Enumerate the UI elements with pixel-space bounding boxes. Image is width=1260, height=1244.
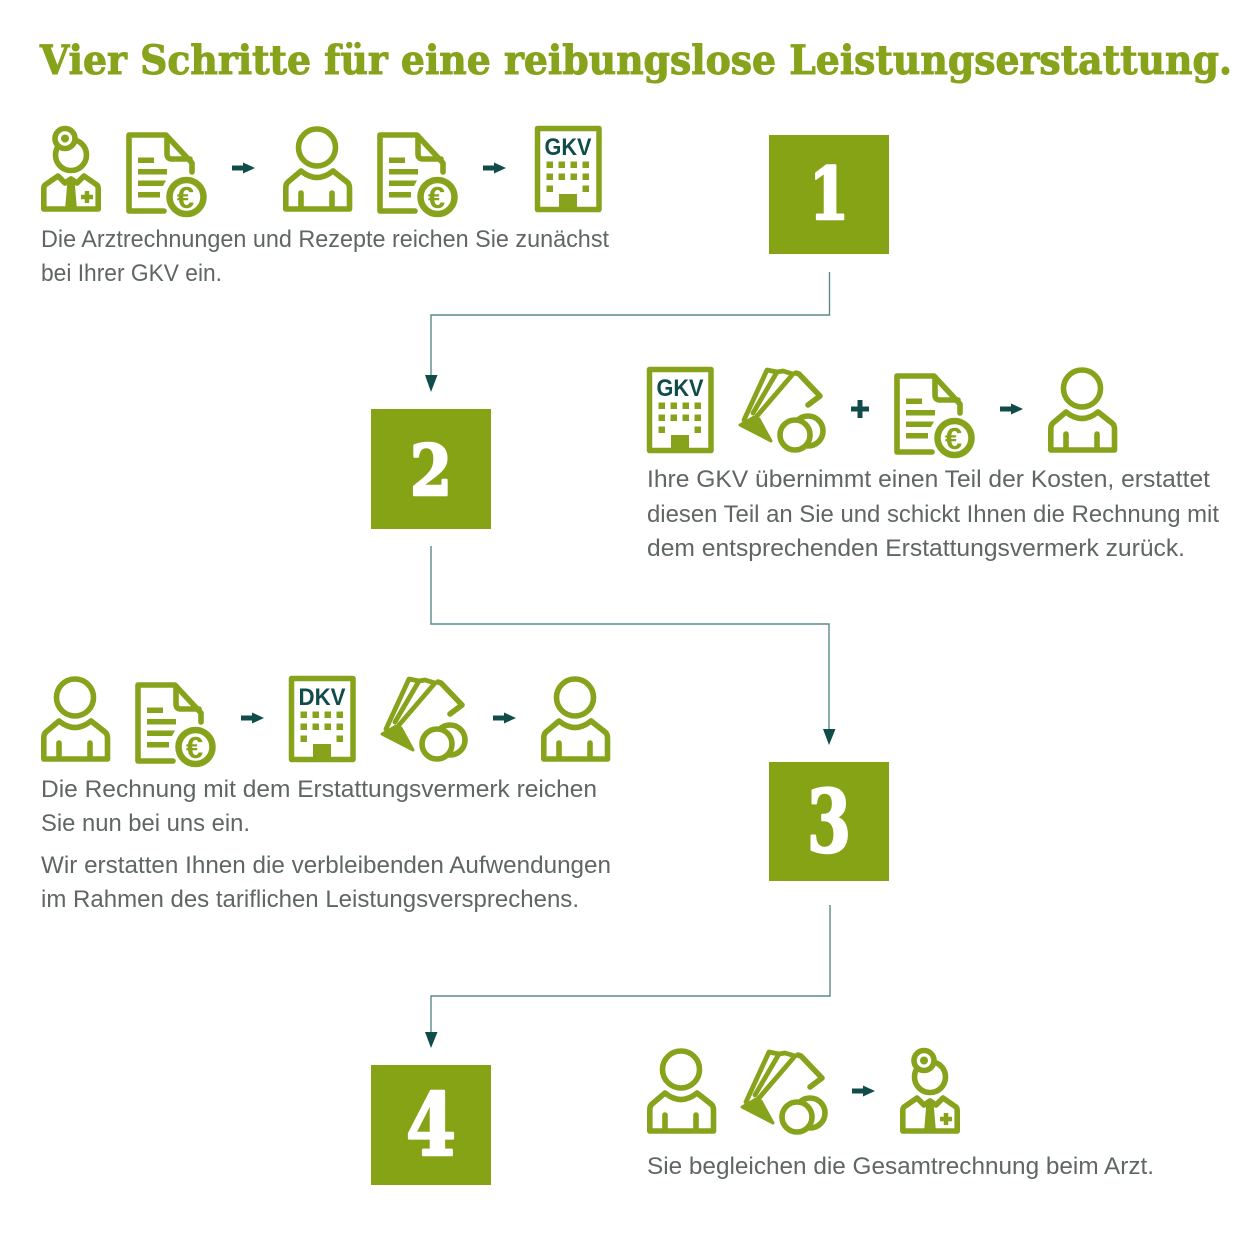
icon: invoice with euro xyxy=(129,135,204,215)
icon: invoice with euro: € xyxy=(428,180,445,215)
step 3 number box: 3 xyxy=(807,772,851,873)
connector 2 to 3 xyxy=(431,546,836,745)
step 4 icon row xyxy=(650,1050,957,1132)
step 1 icon row xyxy=(44,128,599,215)
icon: doctor xyxy=(44,128,98,210)
step 1 text: bei Ihrer GKV ein. xyxy=(41,260,222,287)
step 3 number box xyxy=(769,762,889,881)
icon: invoice with euro xyxy=(897,376,972,456)
arrow xyxy=(1000,404,1023,414)
arrow xyxy=(852,1086,875,1096)
icon: person xyxy=(44,679,108,759)
icon: GKV building xyxy=(650,370,711,452)
icon: person xyxy=(1051,370,1114,450)
icon: doctor xyxy=(903,1050,957,1132)
step 1 text xyxy=(41,226,609,287)
plus sign xyxy=(851,400,869,418)
step 1 number box: 1 xyxy=(809,151,849,236)
icon: invoice with euro: € xyxy=(945,421,962,456)
step 1 text: Die Arztrechnungen und Rezepte reichen Sie zunächst xyxy=(41,226,609,253)
arrow xyxy=(232,162,255,174)
icon: GKV building xyxy=(538,128,599,211)
step 2 icon row xyxy=(650,370,1114,456)
step 3 text: Die Rechnung mit dem Erstattungsvermerk reichen xyxy=(41,776,597,803)
step 4 number box xyxy=(371,1065,491,1185)
step 2 number box xyxy=(371,409,491,529)
step 3 text: Sie nun bei uns ein. xyxy=(41,810,250,837)
icon: invoice with euro xyxy=(380,135,454,215)
step 2 number box: 2 xyxy=(410,429,452,512)
step 2 text: diesen Teil an Sie und schickt Ihnen die Rechnung mit xyxy=(647,501,1219,528)
arrow xyxy=(483,162,506,174)
icon: invoice with euro xyxy=(138,685,212,765)
icon: money xyxy=(740,370,823,450)
icon: invoice with euro: € xyxy=(186,730,203,765)
icon: GKV building: GKV xyxy=(656,375,704,402)
connector 3 to 4 xyxy=(425,905,830,1048)
step 1 number box xyxy=(769,135,889,254)
icon: person xyxy=(650,1051,714,1131)
step 2 text: Ihre GKV übernimmt einen Teil der Kosten, erstattet xyxy=(647,466,1210,493)
step 3 text: Wir erstatten Ihnen die verbleibenden Aufwendungen xyxy=(41,852,611,879)
icon: invoice with euro: € xyxy=(177,180,194,215)
icon: GKV building: GKV xyxy=(544,134,592,161)
arrow xyxy=(241,712,264,724)
icon: DKV building: DKV xyxy=(298,684,346,711)
icon: DKV building xyxy=(292,678,353,761)
icon: money xyxy=(742,1052,825,1132)
step 3 text: im Rahmen des tariflichen Leistungsversprechens. xyxy=(41,886,579,913)
step 2 text xyxy=(647,466,1219,562)
step 2 text: dem entsprechenden Erstattungsvermerk zurück. xyxy=(647,535,1185,562)
step 3 icon row xyxy=(44,678,608,765)
arrow xyxy=(493,712,516,724)
step 4 number box: 4 xyxy=(406,1075,456,1176)
icon: person xyxy=(286,129,350,209)
icon: money xyxy=(382,679,465,759)
step 3 text xyxy=(41,776,611,913)
icon: person xyxy=(544,679,608,759)
connector 1 to 2 xyxy=(425,272,830,392)
step 4 text: Sie begleichen die Gesamtrechnung beim Arzt. xyxy=(647,1153,1154,1180)
